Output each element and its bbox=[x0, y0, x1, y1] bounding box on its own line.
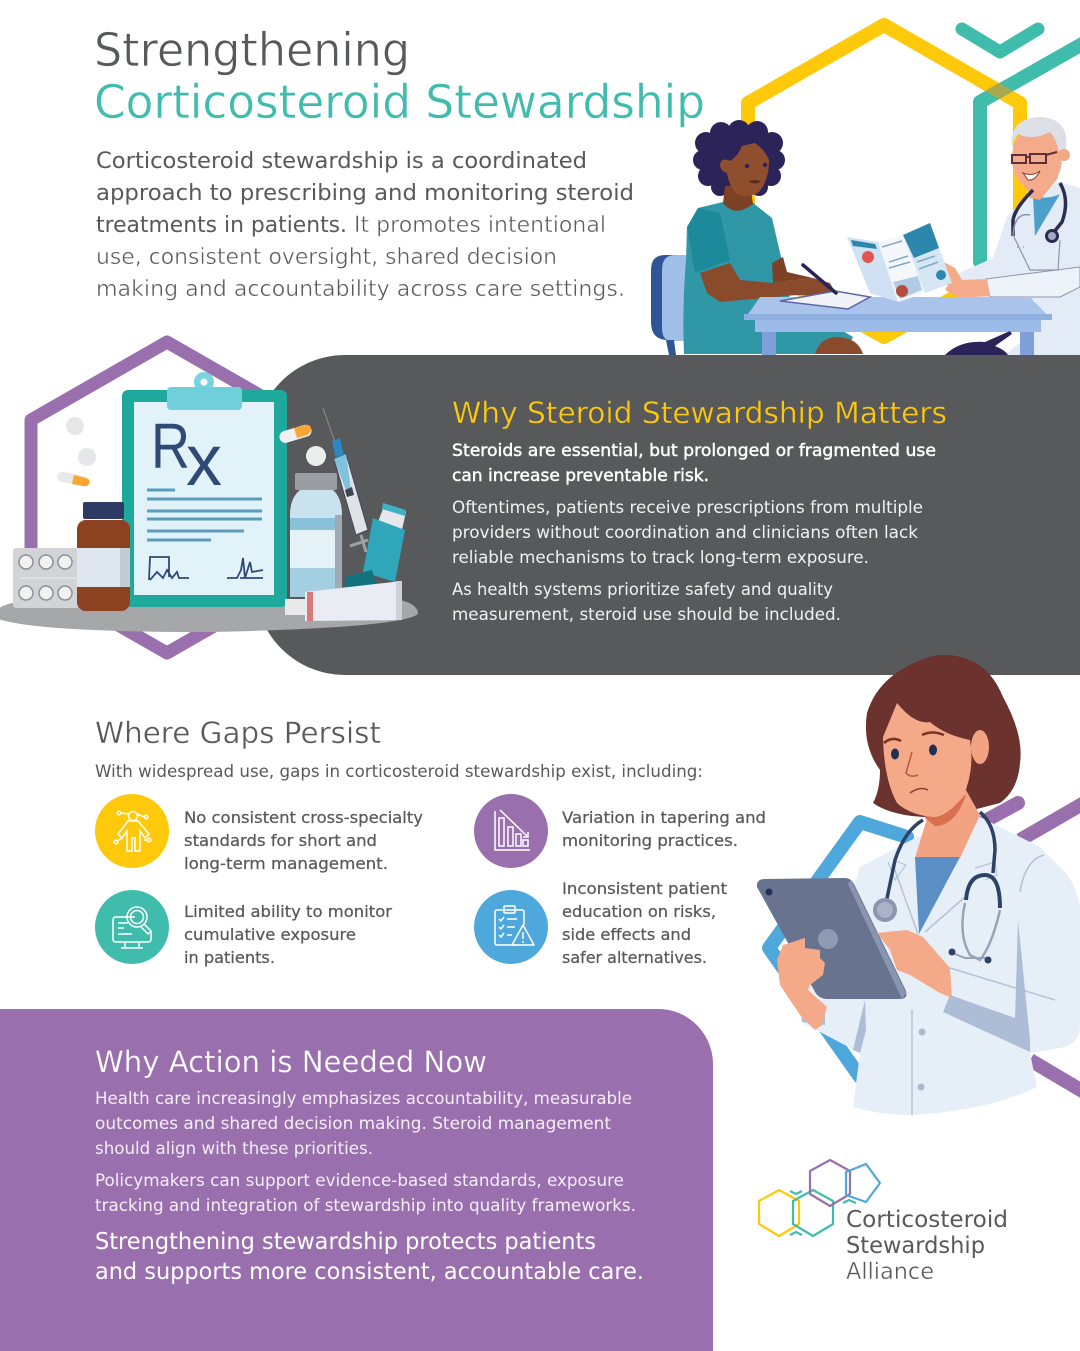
logo wordmark: Corticosteroid bbox=[846, 1207, 1008, 1233]
pills bbox=[56, 417, 326, 487]
curly hair bbox=[693, 120, 785, 196]
syringe bbox=[323, 408, 368, 552]
rx mark: R bbox=[151, 410, 190, 482]
hands bbox=[777, 938, 827, 1030]
text: cumulative exposure bbox=[184, 925, 356, 944]
intro text block: treatments in patients. bbox=[96, 213, 347, 238]
text: side effects and bbox=[562, 925, 691, 944]
icon: monitor with magnifier bbox=[95, 890, 169, 964]
lapels bbox=[888, 860, 997, 880]
icon: declining bar chart bbox=[474, 794, 548, 868]
text: No consistent cross-specialty bbox=[184, 808, 423, 827]
decorative hexagons: top scene bbox=[748, 25, 1080, 337]
lab coat bbox=[800, 817, 1080, 1115]
panel: why action is needed now bbox=[0, 1009, 713, 1351]
rx mark: x bbox=[186, 421, 222, 501]
heading: Why Action is Needed Now bbox=[95, 1045, 487, 1079]
heading: where gaps persist: Where Gaps Persist bbox=[95, 716, 381, 750]
tablet bbox=[757, 878, 906, 999]
heading: Why Steroid Stewardship Matters bbox=[452, 396, 947, 430]
gap item: specialty standards bbox=[95, 794, 423, 873]
title: Corticosteroid Stewardship bbox=[94, 75, 705, 129]
closing statement: Strengthening stewardship protects patients bbox=[95, 1229, 596, 1255]
gap item: cumulative exposure bbox=[95, 890, 392, 967]
notebook and pen bbox=[780, 265, 870, 309]
bold statement bbox=[452, 441, 936, 485]
bold statement: can increase preventable risk. bbox=[452, 466, 709, 485]
body text: Health care increasingly emphasizes accountability, measurable bbox=[95, 1089, 632, 1108]
logo wordmark bbox=[846, 1207, 1008, 1285]
body text: measurement, steroid use should be included. bbox=[452, 605, 841, 624]
decorative hexagons: behind clinician bbox=[769, 803, 1080, 1092]
text bbox=[184, 808, 423, 873]
doctor bbox=[925, 117, 1080, 355]
text bbox=[184, 902, 392, 967]
intro text block: Corticosteroid stewardship is a coordinated bbox=[96, 149, 587, 174]
rx mark bbox=[151, 410, 222, 501]
blister pack bbox=[13, 548, 79, 608]
body text: reliable mechanisms to track long-term exposure. bbox=[452, 548, 869, 567]
logo mark bbox=[759, 1160, 880, 1236]
table bbox=[744, 297, 1052, 355]
illustration: prescription and medications bbox=[0, 372, 418, 632]
bold statement: Steroids are essential, but prolonged or fragmented use bbox=[452, 441, 936, 460]
text: standards for short and bbox=[184, 831, 377, 850]
body text bbox=[95, 1089, 636, 1215]
body text: tracking and integration of stewardship into quality frameworks. bbox=[95, 1196, 636, 1215]
text bbox=[562, 808, 766, 850]
icon: checklist with warning bbox=[474, 890, 548, 964]
gap item: patient education bbox=[474, 879, 727, 967]
ointment tube bbox=[285, 581, 402, 621]
intro line: With widespread use, gaps in corticosteroid stewardship exist, including: bbox=[95, 762, 703, 781]
logo: corticosteroid stewardship alliance bbox=[759, 1160, 1008, 1285]
text: Inconsistent patient bbox=[562, 879, 727, 898]
gap item: tapering variation bbox=[474, 794, 766, 868]
logo wordmark: Alliance bbox=[846, 1259, 934, 1285]
brochure bbox=[847, 223, 952, 302]
intro text block: making and accountability across care settings. bbox=[96, 277, 625, 302]
body text: As health systems prioritize safety and quality bbox=[452, 580, 833, 599]
intro text block: use, consistent oversight, shared decision bbox=[96, 245, 557, 270]
text: long-term management. bbox=[184, 854, 388, 873]
text: monitoring practices. bbox=[562, 831, 738, 850]
body text: Policymakers can support evidence-based standards, exposure bbox=[95, 1171, 624, 1190]
hair bbox=[866, 655, 1021, 817]
inhaler bbox=[345, 503, 406, 588]
closing statement: and supports more consistent, accountable care. bbox=[95, 1259, 644, 1285]
vial bbox=[290, 473, 342, 597]
coat details bbox=[800, 855, 1055, 1115]
body text: Oftentimes, patients receive prescriptions from multiple bbox=[452, 498, 923, 517]
body text: outcomes and shared decision making. Steroid management bbox=[95, 1114, 612, 1133]
body text: providers without coordination and clinicians often lack bbox=[452, 523, 918, 542]
face bbox=[883, 703, 971, 817]
intro text block: approach to prescribing and monitoring steroid bbox=[96, 181, 634, 206]
chair bbox=[651, 255, 700, 355]
logo wordmark: Stewardship bbox=[846, 1233, 985, 1259]
intro text block: It promotes intentional bbox=[354, 213, 606, 238]
text: Variation in tapering and bbox=[562, 808, 766, 827]
medicine bottle bbox=[77, 502, 130, 611]
panel: why steroid stewardship matters bbox=[255, 355, 1080, 675]
text: education on risks, bbox=[562, 902, 716, 921]
icon: person with nodes bbox=[95, 794, 169, 868]
patient bbox=[683, 120, 863, 354]
closing statement bbox=[95, 1229, 644, 1285]
illustration: clinician with tablet bbox=[757, 655, 1080, 1115]
text: in patients. bbox=[184, 948, 275, 967]
text: safer alternatives. bbox=[562, 948, 707, 967]
body text: should align with these priorities. bbox=[95, 1139, 373, 1158]
illustration: patient and doctor at a table bbox=[651, 117, 1080, 355]
tray shadow bbox=[0, 600, 418, 632]
intro text block bbox=[96, 149, 634, 302]
text: Limited ability to monitor bbox=[184, 902, 392, 921]
title: Strengthening bbox=[94, 23, 410, 77]
clipboard bbox=[122, 372, 287, 607]
stethoscope bbox=[875, 812, 1000, 964]
decorative hexagon: purple behind clipboard bbox=[31, 342, 303, 653]
facial features bbox=[884, 732, 944, 793]
title bbox=[94, 23, 705, 129]
text bbox=[562, 879, 727, 967]
neck and scrubs bbox=[915, 790, 980, 858]
body text bbox=[452, 498, 923, 624]
